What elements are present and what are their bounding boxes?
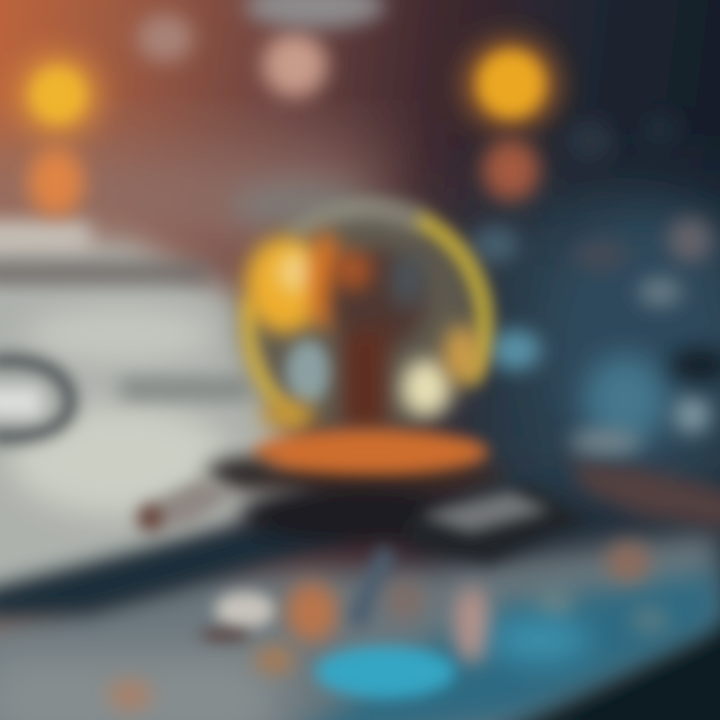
icon: pale bokeh lights at the top (137, 0, 385, 227)
icon: glowing orb (244, 202, 484, 438)
panel: blue bokeh region on the right (471, 114, 720, 470)
panel: lower floor surface (0, 530, 720, 720)
panel: brown object at right edge (569, 430, 720, 530)
icon: upper left light reflection (28, 148, 84, 216)
icon: dark ring object at left edge (0, 361, 70, 437)
panel: dark lower right corner (490, 620, 720, 720)
icon: orange orb pedestal (225, 430, 505, 496)
panel: dark diagonal desk edge (0, 500, 350, 620)
panel: pale desk surface on the left (0, 222, 320, 620)
panel: dark tablet with pale top (405, 485, 590, 565)
icon: upper right light reflection (483, 140, 539, 200)
icon: upper left yellow light (16, 53, 100, 137)
icon: scattered tile near the centre left (136, 478, 235, 532)
icon: scattered fragments on the floor (108, 542, 668, 711)
icon: turquoise puddle (315, 618, 590, 698)
icon: shadow beneath pedestal (206, 458, 460, 543)
icon: upper right yellow light (465, 40, 557, 128)
